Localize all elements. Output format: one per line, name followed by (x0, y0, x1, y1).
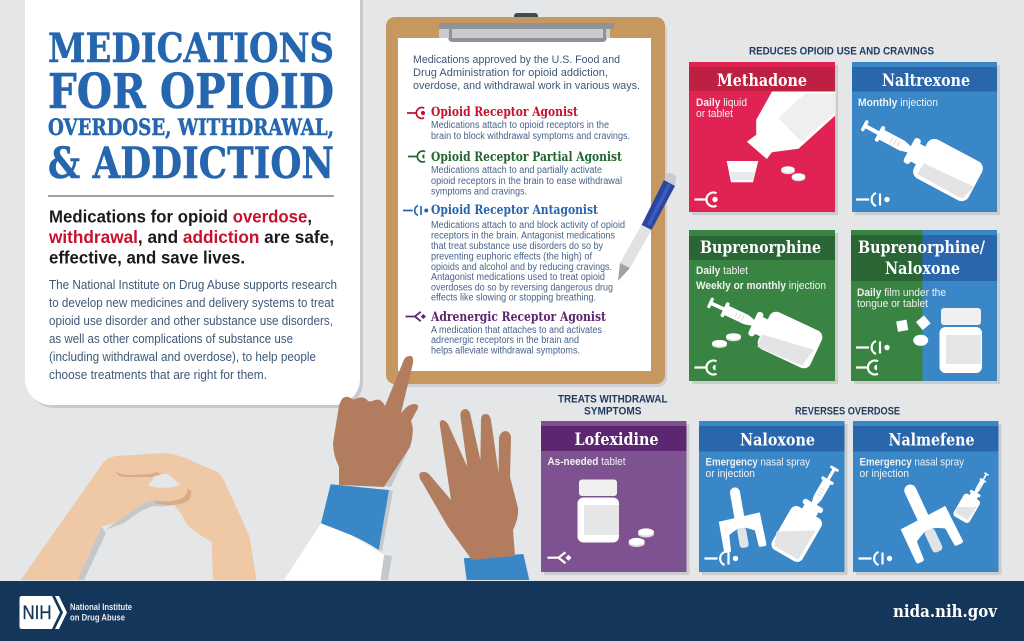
body text: The National Institute on Drug Abuse supports research (49, 277, 337, 292)
icon: films and tablet (896, 315, 931, 346)
title: & ADDICTION (48, 139, 334, 189)
list item: opioid receptor antagonist: opioids and alcohol and by reducing cravings. (431, 262, 612, 273)
icon: partial agonist (694, 360, 716, 374)
body text: choose treatments that are right for them. (49, 367, 267, 382)
icon: syringe and vial (952, 469, 995, 524)
NIH logo: NIH (22, 603, 52, 624)
card: nalmefene: or injection (860, 468, 909, 480)
icon: antagonist (856, 341, 890, 354)
website: nida.nih.gov (893, 602, 998, 622)
icon: partial agonist (856, 360, 878, 374)
illustration: pointing hand with sleeve (284, 356, 418, 580)
title: OVERDOSE, WITHDRAWAL, (48, 115, 334, 141)
subheading: withdrawal, and addiction are safe, (48, 227, 334, 247)
body text: to develop new medicines and delivery systems to treat (49, 295, 334, 310)
icon: agonist (694, 192, 718, 206)
heading: reduces opioid use and cravings: REDUCES OPIOID USE AND CRAVINGS (749, 46, 934, 58)
paper (398, 38, 651, 371)
card: nalmefene: Emergency nasal spray (860, 457, 964, 469)
title (48, 25, 334, 189)
subheading (48, 206, 334, 268)
organization name: National Institute (70, 602, 132, 612)
card: naloxone: Emergency nasal spray (706, 457, 810, 469)
list item: opioid receptor antagonist (403, 203, 625, 304)
list item: opioid receptor antagonist: receptors in the brain. Antagonist medications (431, 230, 615, 242)
illustration: open hand with cuff (419, 409, 529, 580)
card: methadone: or tablet (696, 108, 733, 120)
card: nalmefene: Nalmefene (888, 431, 974, 450)
list item: opioid receptor agonist (407, 105, 630, 142)
list item: adrenergic receptor agonist: helps alleviate withdrawal symptoms. (431, 346, 580, 356)
body text: opioid use disorder and other substance use disorders, (49, 313, 333, 328)
clip (439, 23, 614, 42)
organization name (70, 602, 132, 623)
heading: reverses overdose: REVERSES OVERDOSE (795, 406, 900, 418)
list item: opioid receptor antagonist: effects like slowing or stopping breathing. (431, 292, 596, 304)
title: MEDICATIONS (48, 25, 334, 72)
body text: (including withdrawal and overdose), to help people (49, 349, 316, 364)
card: buprenorphine/naloxone (851, 230, 1000, 384)
list item: opioid receptor partial agonist: opioid receptors in the brain to ease withdrawal (431, 176, 622, 187)
icon: nasal spray (713, 484, 767, 553)
card: buprenorphine (689, 230, 838, 384)
icon: bottle (748, 92, 835, 158)
panel: introduction (25, 0, 363, 408)
list item: adrenergic receptor agonist (406, 310, 606, 356)
icon: tablets (629, 528, 654, 547)
subheading: effective, and save lives. (49, 248, 245, 268)
card: buprenorphine: Weekly or monthly injection (696, 280, 826, 292)
title: FOR OPIOID (48, 64, 334, 120)
list item: opioid receptor antagonist: Opioid Receptor Antagonist (431, 203, 598, 218)
intro text (413, 54, 640, 92)
card: buprenorphine/naloxone: Buprenorphine/ (858, 238, 986, 257)
list item: opioid receptor antagonist: overdoses do so by reversing dangerous drug (431, 282, 613, 294)
list item: opioid receptor partial agonist: Medications attach to and partially activate (431, 165, 602, 176)
intro text: Drug Administration for opioid addiction, (413, 67, 608, 79)
list item: opioid receptor agonist: Medications attach to opioid receptors in the (431, 120, 609, 131)
clipboard (386, 13, 667, 387)
card: nalmefene (853, 421, 1002, 575)
heading: treats withdrawal symptoms (558, 394, 668, 418)
icon: antagonist (858, 552, 892, 565)
card: naltrexone: Naltrexone (882, 71, 970, 90)
icon: tablets (781, 166, 805, 181)
icon: adrenergic agonist (548, 552, 572, 563)
icon: syringe and vial (853, 106, 986, 204)
icon: pill bottle (578, 480, 619, 542)
NIH logo (20, 596, 67, 629)
icon: nasal spray (885, 474, 964, 564)
list item: opioid receptor partial agonist (408, 150, 622, 198)
icon: dosing cup (727, 161, 758, 182)
body text: as well as other complications of substance use (49, 331, 293, 346)
icon: antagonist (856, 193, 890, 206)
list item: opioid receptor antagonist: preventing euphoric effects (the high) of (431, 252, 592, 262)
icon: syringe and vial (700, 284, 825, 371)
card: naloxone: Naloxone (740, 431, 815, 450)
organization name: on Drug Abuse (70, 613, 125, 623)
list item: adrenergic receptor agonist: A medication that attaches to and activates (431, 325, 602, 336)
list item: opioid receptor antagonist: Medications attach to and block activity of opioid (431, 220, 625, 231)
list item: opioid receptor antagonist: Antagonist medications used to treat opioid (431, 272, 605, 283)
card: methadone: Methadone (717, 71, 807, 90)
icon: pill bottle (940, 308, 982, 373)
list item: opioid receptor antagonist: that treat substance use disorders do so by (431, 241, 603, 252)
card: lofexidine: Lofexidine (574, 430, 658, 449)
card: lofexidine: As-needed tablet (548, 456, 626, 468)
heading: treats withdrawal symptoms: TREATS WITHDRAWAL (558, 394, 668, 406)
card: methadone: Daily liquid (696, 97, 747, 109)
icon: syringe and vial (769, 459, 850, 564)
subheading: Medications for opioid overdose, (49, 206, 312, 226)
card: buprenorphine/naloxone: tongue or tablet (857, 298, 928, 310)
intro text: Medications approved by the U.S. Food and (413, 54, 620, 66)
card: naloxone (699, 421, 850, 575)
icon: pen (618, 173, 676, 281)
footer (0, 581, 1024, 641)
card: lofexidine (541, 421, 690, 575)
list item: opioid receptor agonist: Opioid Receptor Agonist (431, 105, 578, 120)
list item: adrenergic receptor agonist: adrenergic receptors in the brain and (431, 335, 579, 346)
list item: opioid receptor agonist: brain to block withdrawal symptoms and cravings. (431, 131, 630, 142)
body text (49, 277, 337, 382)
heading: treats withdrawal symptoms: SYMPTOMS (584, 406, 642, 418)
card: buprenorphine: Buprenorphine (700, 238, 821, 257)
illustration: patient hands (21, 453, 257, 580)
icon: tablets (712, 333, 741, 348)
list item: opioid receptor partial agonist: symptoms and cravings. (431, 186, 527, 198)
list item: opioid receptor partial agonist: Opioid Receptor Partial Agonist (431, 150, 622, 165)
icon: antagonist (704, 552, 738, 565)
card: buprenorphine/naloxone: Daily film under the (857, 287, 946, 299)
card: buprenorphine: Daily tablet (696, 265, 748, 277)
intro text: overdose, and withdrawal work in various ways. (413, 80, 640, 92)
card: methadone (689, 62, 838, 215)
card: buprenorphine/naloxone: Naloxone (885, 259, 960, 278)
card: naltrexone (852, 62, 1000, 215)
card: naltrexone: Monthly injection (858, 97, 938, 109)
card: naloxone: or injection (706, 468, 755, 480)
list item: adrenergic receptor agonist: Adrenergic Receptor Agonist (430, 310, 606, 325)
